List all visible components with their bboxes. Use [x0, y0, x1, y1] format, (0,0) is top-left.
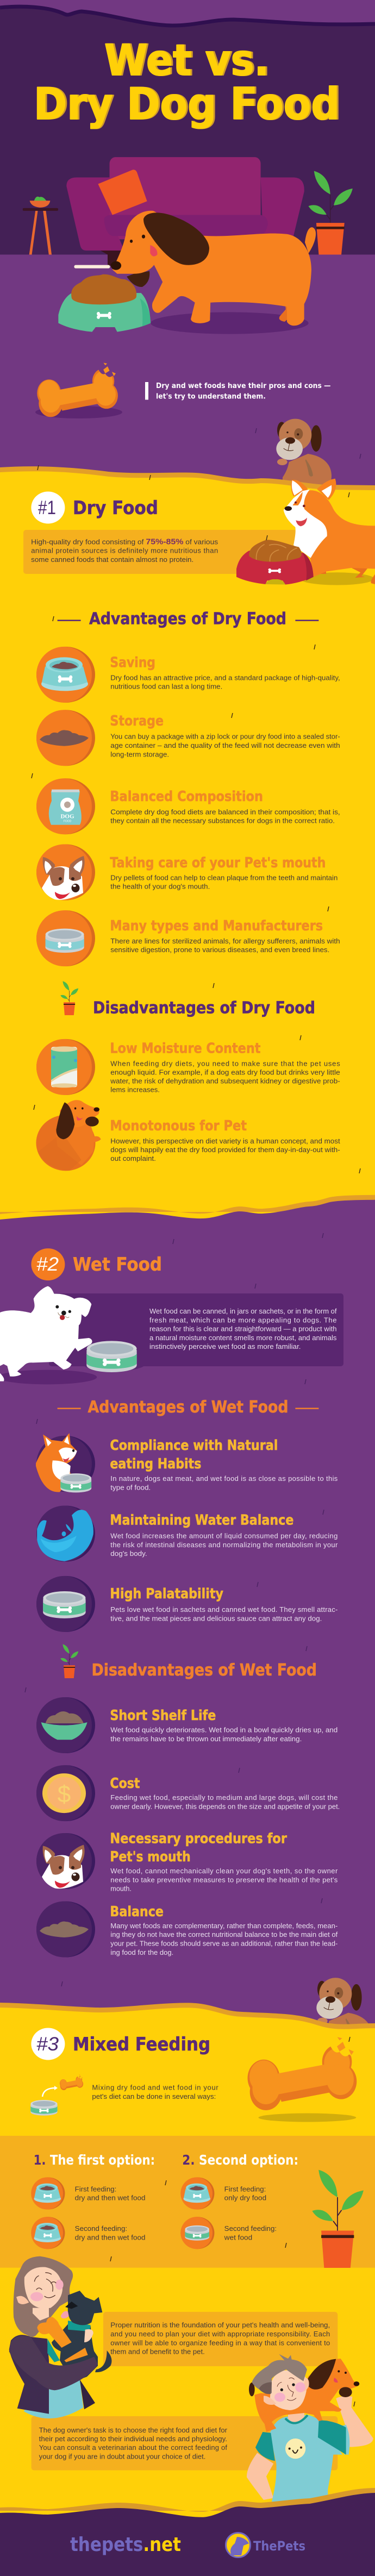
icon: food pile — [36, 1901, 95, 1958]
icon: bowl — [180, 2177, 214, 2210]
compliance text: eating Habits — [110, 1456, 201, 1472]
low moisture text — [110, 1041, 340, 1094]
balance text: your pet. These foods should serve as an additional, rather than the lead- — [110, 1940, 338, 1948]
low moisture text: enough liquid. For example, if a dog eats dry food but drinks very little — [110, 1068, 340, 1076]
heading: #2 Wet Food: Wet Food — [73, 1254, 162, 1276]
item: monotonous — [36, 1100, 340, 1171]
feeding text: First feeding: — [75, 2185, 116, 2193]
sofa — [66, 157, 304, 268]
compliance text: Compliance with Natural — [110, 1437, 278, 1454]
mixing text: Mixing dry food and wet food in your — [92, 2084, 218, 2092]
heading: #2 Wet Food: #2 — [36, 1254, 59, 1275]
illustration: woman hugging black dog — [9, 2256, 112, 2418]
green can — [86, 1341, 137, 1372]
text: dry food summary: some canned foods that contain almost no protein. — [31, 555, 193, 564]
item: balance — [36, 1901, 338, 1958]
water text — [110, 1512, 338, 1558]
many types text: There are lines for sterilized animals, for allergy sufferers, animals with — [110, 937, 340, 945]
icon: coin: $ — [58, 1781, 71, 1808]
icon: small plant — [60, 1644, 78, 1678]
icon: corgi face — [36, 1833, 95, 1889]
balanced text: they contain all the necessary substances for dogs in the correct ratio. — [110, 816, 335, 825]
top wave line — [0, 7, 375, 26]
mouth text: Dry pellets of food can help to clean plaque from the teeth and maintain — [110, 873, 338, 881]
heading: #2 Wet Food — [31, 1248, 162, 1280]
corgi — [284, 479, 375, 584]
feeding text — [224, 2185, 266, 2202]
orange pillow — [98, 170, 147, 215]
website name: thepets.net — [70, 2534, 181, 2556]
text: proper nutrition: them and of benefit to the pet. — [110, 2347, 205, 2355]
option 2 heading: 2. Second option: — [182, 2152, 298, 2168]
mouth text — [110, 855, 338, 890]
illustration: living room with dachshund eating — [23, 157, 353, 334]
text: proper nutrition: Proper nutrition is the foundation of your pet's health and well-being, — [110, 2321, 330, 2329]
heading: advantages of dry food: Advantages of Dry Food — [89, 610, 286, 629]
storage text: You can buy a package with a zip lock or pour dry food into a sealed stor- — [110, 732, 340, 740]
option 2: second feeding — [180, 2217, 277, 2249]
procedures text: Necessary procedures for — [110, 1831, 287, 1847]
bone shadow — [35, 406, 122, 418]
shelf life text: the remains have to be thrown out immediately after eating. — [110, 1735, 302, 1743]
feeding text: Second feeding: — [75, 2224, 127, 2233]
puppy peeking over wave — [316, 1978, 372, 2044]
puppy — [276, 419, 332, 485]
panel: nutrition text background — [103, 2312, 338, 2366]
text: owner task: You can consult a veterinarian about the correct feeding of — [39, 2443, 227, 2452]
item: necessary procedures — [36, 1831, 338, 1892]
procedures text: mouth. — [110, 1884, 132, 1892]
item: storage — [36, 710, 340, 766]
text: dry food summary: High-quality dry food consisting of 75%-85% of various — [31, 537, 218, 547]
big bone shadow — [258, 2113, 356, 2122]
intro text: Dry and wet foods have their pros and cons — — [156, 382, 330, 390]
mouth text: the health of your dog's mouth. — [110, 882, 210, 890]
heading: #1 Dry Food: #1 — [38, 497, 56, 518]
text: owner task: their pet according to their individual needs and physiology. — [39, 2435, 227, 2443]
icon: blue bowl — [36, 647, 95, 703]
monotonous text — [110, 1118, 340, 1162]
cost text: Feeding wet food, especially to medium and large dogs, will cost the — [110, 1793, 338, 1802]
low moisture text: When feeding dry diets, you need to make sure that the pet uses — [110, 1059, 340, 1067]
illustration: white dog with can — [0, 1286, 145, 1384]
feeding text: dry and then wet food — [75, 2233, 146, 2241]
text: owner task: your dog if you are in doubt about your choice of diet. — [39, 2452, 205, 2460]
intro text: let's try to understand them. — [156, 392, 266, 401]
cost text: Cost — [110, 1775, 140, 1792]
icon: kibble pile — [36, 710, 95, 766]
mixing text — [92, 2084, 218, 2100]
heading: disadvantages of dry food: Disadvantages of Dry Food — [93, 999, 315, 1018]
potted plant — [309, 171, 353, 255]
panel: dry food summary — [23, 530, 297, 574]
side table — [23, 197, 58, 255]
monotonous text: However, this perspective on diet variety is a human concept, and most — [110, 1137, 340, 1145]
balance text: ing they do not have the correct nutritional balance to be the main diet of — [110, 1930, 338, 1939]
low moisture text: Low Moisture Content — [110, 1041, 260, 1057]
shelf life text: Wet food quickly deteriorates. Wet food in a bowl quickly dries up, and — [110, 1726, 338, 1734]
balanced text: Complete dry dog food diets are balanced in their composition; that is, — [110, 808, 340, 816]
item: compliance — [36, 1433, 338, 1492]
water text: Maintaining Water Balance — [110, 1512, 293, 1528]
icon: corgi face — [36, 845, 95, 900]
balance text: ing food for the dog. — [110, 1948, 173, 1956]
water text: dog's body. — [110, 1549, 147, 1558]
logo — [226, 2533, 305, 2558]
icon: food bag: DOG — [60, 814, 74, 820]
procedures text: needs to take preventive measures to preserve the health of the pet's — [110, 1875, 338, 1884]
text: dry food summary — [31, 537, 218, 564]
option 2: first feeding — [180, 2177, 266, 2210]
feeding text — [75, 2224, 146, 2241]
feeding text: Second feeding: — [224, 2224, 277, 2233]
text: proper nutrition: and you need to plan your diet with appropriate responsibility. Each — [110, 2330, 330, 2338]
illustration: corgi with red bowl — [236, 479, 375, 585]
heading: disadvantages of wet food: Disadvantages of Wet Food — [91, 1661, 317, 1680]
dog shadow — [151, 312, 309, 334]
palatability text — [110, 1586, 338, 1623]
balance text: Balance — [110, 1904, 164, 1920]
background: wall and floor — [0, 0, 375, 492]
procedures text — [110, 1831, 338, 1892]
heading: #3 Mixed Feeding — [31, 2028, 210, 2060]
saving text — [110, 654, 340, 691]
palatability text: tive, and the meat pieces and delicious sauce can attract any dog. — [110, 1615, 322, 1623]
low moisture text: lems increases. — [110, 1086, 160, 1094]
saving text: Dry food has an attractive price, and a standard package of high-quality, — [110, 674, 340, 681]
item: short shelf life — [36, 1697, 338, 1753]
feeding text: dry and then wet food — [75, 2194, 146, 2202]
icon: green bowl with food — [36, 1697, 95, 1753]
heading: #3 Mixed Feeding: #3 — [36, 2034, 59, 2055]
shelf life text: Short Shelf Life — [110, 1708, 216, 1724]
cost text: owner dearly. However, this depends on the size and appetite of your pet. — [110, 1802, 340, 1810]
palatability text: High Palatability — [110, 1586, 223, 1602]
procedures text: Pet's mouth — [110, 1849, 191, 1865]
title: Dry Dog Food — [34, 79, 340, 129]
icon: can to bone — [30, 2074, 84, 2116]
balanced text — [110, 789, 340, 825]
compliance text: type of food. — [110, 1483, 151, 1491]
many types text: Many types and Manufacturers — [110, 918, 323, 934]
mixing text: pet's diet can be done in several ways: — [92, 2092, 216, 2100]
palatability text: Pets love wet food in sachets and canned wet food. They smell attrac- — [110, 1605, 338, 1614]
item: cost — [36, 1765, 340, 1821]
feeding text — [224, 2224, 277, 2241]
text: owner task: The dog owner's task is to choose the right food and diet for — [39, 2426, 228, 2434]
icon: opened can — [36, 1039, 95, 1095]
title: Wet vs. — [104, 36, 269, 85]
storage text: Storage — [110, 713, 164, 729]
monotonous text: Monotonous for Pet — [110, 1118, 247, 1134]
yellow section with wave — [0, 2003, 375, 2522]
text: proper nutrition: owner will be able to organize feeding in a way that is convenient to — [110, 2339, 330, 2347]
heading: #1 Dry Food — [31, 491, 158, 524]
water text: the risk of intestinal diseases and normalizing the metabolism in your — [110, 1541, 338, 1549]
icon: blue can — [36, 910, 95, 966]
text: wet food summary: a natural moisture content smells more robust, and animals — [149, 1334, 337, 1342]
option 1: first feeding — [31, 2177, 145, 2210]
low moisture text: water, the risk of dehydration and subsequent kidney or digestive prob- — [110, 1077, 340, 1085]
item: saving — [36, 647, 340, 703]
panel: owner task background — [32, 2416, 338, 2471]
big plant — [312, 2170, 364, 2268]
storage text — [110, 713, 340, 759]
text: proper nutrition — [110, 2321, 330, 2355]
title — [34, 36, 340, 129]
heading: #3 Mixed Feeding: Mixed Feeding — [73, 2034, 210, 2055]
cost text — [110, 1775, 340, 1810]
icon: corgi and can — [36, 1433, 95, 1492]
monotonous text: dogs will happily eat the dry food provided for them day-in-day-out with- — [110, 1146, 340, 1154]
text: wet food summary — [149, 1307, 337, 1350]
feeding text: only dry food — [224, 2194, 266, 2202]
icon: bowl — [31, 2217, 65, 2249]
heading: advantages of wet food: Advantages of Wet Food — [88, 1398, 288, 1417]
item: balanced composition — [36, 778, 340, 834]
many types text: sensitive digestion, prone to various diseases, and even breed lines. — [110, 946, 329, 954]
text: wet food summary: reason for this is clear and straightforward — a product with — [149, 1325, 337, 1333]
logo: ThePets — [253, 2539, 305, 2554]
text: wet food summary: fresh meat, which can be more appealing to dogs. The — [149, 1316, 337, 1324]
panel: wet food summary — [49, 1293, 343, 1366]
item: low moisture — [36, 1039, 340, 1095]
yellow section with wave — [0, 466, 375, 1228]
procedures text: Wet food, cannot mechanically clean your dog's teeth, so the owner — [110, 1867, 338, 1875]
white dog — [0, 1286, 92, 1381]
feeding text: First feeding: — [224, 2185, 266, 2193]
bone with bite — [37, 363, 120, 417]
option 1: second feeding — [31, 2217, 145, 2249]
icon: green can — [36, 1576, 95, 1632]
footer with wave — [0, 2488, 375, 2576]
monotonous text: out complaint. — [110, 1154, 156, 1162]
water text: Wet food increases the amount of liquid consumed per day, reducing — [110, 1531, 338, 1540]
feeding text — [75, 2185, 146, 2202]
purple section with wave — [0, 1195, 375, 2033]
icon: bowl — [31, 2177, 65, 2210]
item: pet's mouth — [36, 845, 338, 900]
icon: food bag — [36, 778, 95, 834]
icon: small plant — [60, 981, 78, 1015]
storage text: long-term storage. — [110, 750, 169, 759]
option 1 heading: 1. The first option: — [34, 2152, 155, 2168]
intro text — [145, 382, 330, 401]
icon: dog in circle — [36, 1100, 101, 1171]
green dog bowl — [58, 274, 151, 332]
compliance text — [110, 1437, 338, 1491]
feeding text: wet food — [224, 2233, 252, 2241]
compliance text: In nature, dogs eat meat, and wet food is as close as possible to this — [110, 1474, 338, 1483]
heading: #1 Dry Food: Dry Food — [73, 497, 158, 519]
item: many types — [36, 910, 340, 966]
corgi shadow — [300, 572, 374, 585]
illustration: man with dachshund on shoulders — [247, 2354, 373, 2502]
shadows — [0, 1357, 145, 1384]
big bone — [248, 2037, 359, 2110]
icon: coin — [36, 1765, 95, 1821]
balance text: Many wet foods are complementary, rather than complete, feeds, mean- — [110, 1922, 338, 1930]
wall — [0, 7, 375, 254]
text: wet food summary: Wet food can be canned, in jars or sachets, or in the form of — [149, 1307, 337, 1315]
text: owner task — [39, 2426, 228, 2460]
icon: food bag: FOOD — [64, 820, 72, 823]
balanced text: Balanced Composition — [110, 789, 263, 805]
icon: can — [180, 2217, 214, 2249]
saving text: nutritious food can last a long time. — [110, 683, 222, 691]
item: water balance — [36, 1505, 338, 1562]
item: high palatability — [36, 1576, 338, 1632]
text: wet food summary: instinctively perceive wet food as more familiar. — [149, 1342, 301, 1350]
many types text — [110, 918, 340, 954]
mouth text: Taking care of your Pet's mouth — [110, 855, 326, 871]
dachshund — [111, 211, 316, 326]
text: dry food summary: animal protein sources is definitely more nutritious than — [31, 547, 218, 555]
storage text: age container – and the quality of the feed will not decrease even with — [110, 741, 340, 749]
balance text — [110, 1904, 338, 1956]
panel: feeding options — [0, 2136, 375, 2268]
shelf life text — [110, 1708, 338, 1743]
saving text: Saving — [110, 654, 155, 671]
icon: water splash — [36, 1505, 95, 1562]
red bowl — [236, 540, 314, 585]
